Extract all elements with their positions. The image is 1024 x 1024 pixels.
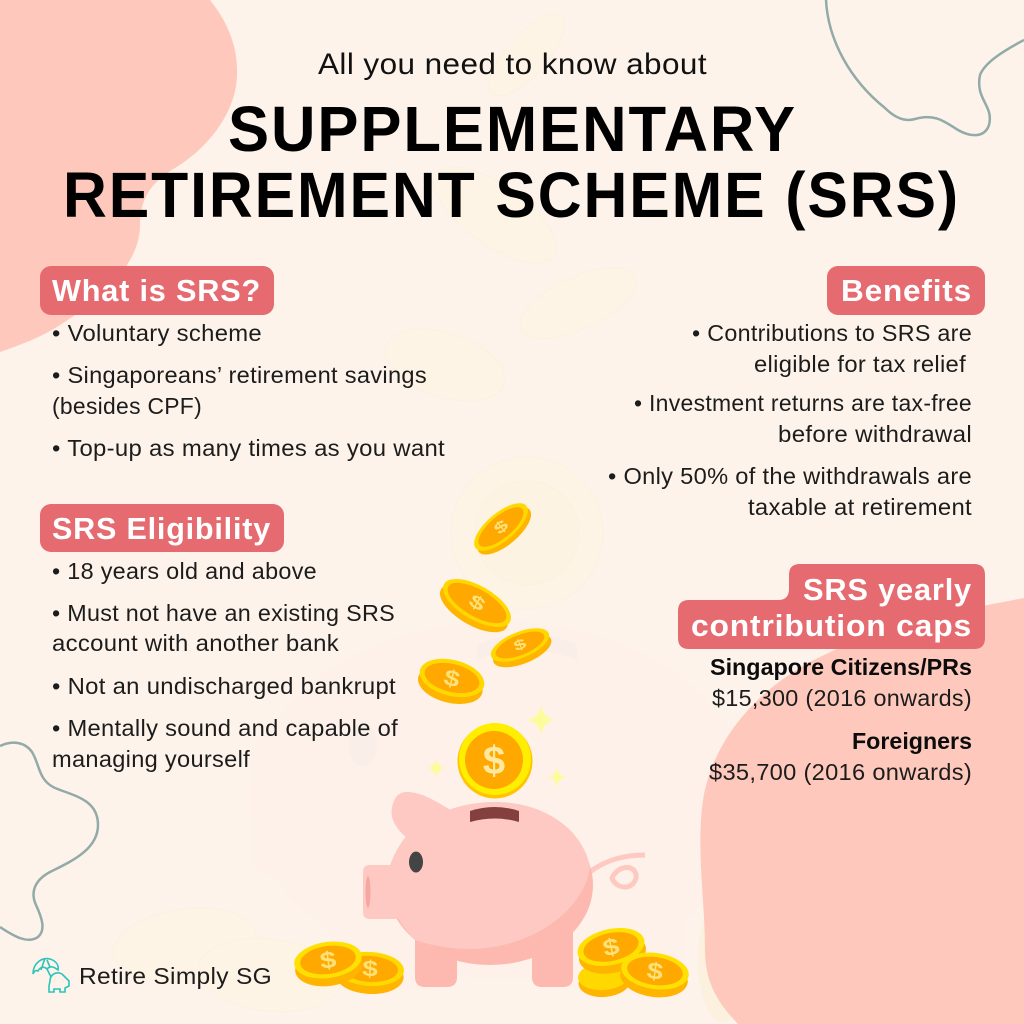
illustration: falling coin 3 bbox=[486, 621, 556, 674]
illustration: falling coin 3: $ bbox=[511, 634, 529, 654]
snout bbox=[363, 865, 398, 919]
panel: SRS eligibility bbox=[40, 504, 398, 772]
main title line 2: RETIREMENT SCHEME (SRS) bbox=[63, 159, 960, 231]
coin stack: right: $ bbox=[600, 932, 622, 962]
nostril bbox=[366, 876, 370, 908]
bullet list: eligible for tax relief bbox=[754, 351, 966, 377]
heading: Benefits bbox=[827, 266, 985, 315]
bullet list: account with another bank bbox=[52, 630, 339, 656]
bullet list: • 18 years old and above bbox=[52, 558, 317, 584]
bullet list: (besides CPF) bbox=[52, 393, 202, 419]
illustration: falling coin 1: $ bbox=[491, 517, 512, 538]
ear bbox=[392, 792, 449, 838]
illustration: falling coin 2 bbox=[433, 569, 518, 642]
illustration: piggy bank bbox=[363, 792, 645, 987]
bullet list: • Contributions to SRS are bbox=[692, 320, 972, 346]
sparkles bbox=[427, 705, 567, 788]
panel: contribution caps bbox=[678, 564, 985, 785]
bullet list: • Top-up as many times as you want bbox=[52, 435, 445, 461]
squiggle: left bbox=[0, 743, 98, 940]
illustration: falling coin 2: $ bbox=[465, 591, 489, 616]
subtitle: All you need to know about bbox=[318, 48, 707, 81]
foreigners cap: Foreigners bbox=[852, 728, 972, 754]
foreigners cap bbox=[709, 728, 972, 785]
heading: SRS Eligibility: SRS Eligibility bbox=[52, 512, 271, 546]
bullet list: • Investment returns are tax-free bbox=[634, 390, 972, 416]
background blob: top left bbox=[0, 0, 237, 352]
heading: What is SRS? bbox=[40, 266, 274, 315]
heading: Benefits: Benefits bbox=[841, 274, 972, 308]
citizens cap: Singapore Citizens/PRs bbox=[710, 654, 972, 680]
bullet list bbox=[52, 320, 445, 461]
bullet list: • Only 50% of the withdrawals are bbox=[608, 463, 972, 489]
bullet list: taxable at retirement bbox=[748, 494, 972, 520]
coin stack: left: $ bbox=[362, 956, 378, 982]
title bbox=[63, 48, 960, 231]
heading: SRS Eligibility bbox=[40, 504, 284, 552]
coin stack: left: $ bbox=[318, 946, 338, 974]
main title line 1: SUPPLEMENTARY bbox=[228, 93, 797, 165]
tail bbox=[590, 855, 645, 887]
coin stack: left bbox=[292, 937, 405, 996]
heading: SRS yearly contribution caps: contribution caps bbox=[691, 609, 972, 643]
illustration: big coin: $ bbox=[483, 739, 505, 783]
bullet list bbox=[52, 558, 398, 772]
panel: benefits bbox=[608, 266, 985, 520]
watermark: faint coin far right bbox=[698, 898, 746, 1022]
illustration: big coin bbox=[458, 723, 532, 798]
bullet list bbox=[608, 320, 972, 520]
coin stack: right bbox=[574, 922, 691, 1001]
heading: What is SRS?: What is SRS? bbox=[52, 274, 261, 308]
illustration: falling coin 1 bbox=[467, 495, 538, 563]
illustration: falling coin 4: $ bbox=[441, 665, 462, 693]
eye bbox=[409, 852, 423, 872]
watermark: faint coins bbox=[109, 3, 646, 1018]
bullet list: managing yourself bbox=[52, 746, 250, 772]
squiggle: top right bbox=[826, 0, 1024, 135]
bullet list: • Mentally sound and capable of bbox=[52, 715, 398, 741]
coin stack: right: $ bbox=[645, 957, 665, 985]
bullet list: • Not an undischarged bankrupt bbox=[52, 673, 396, 699]
coin slot bbox=[470, 807, 519, 822]
foreigners cap: $35,700 (2016 onwards) bbox=[709, 759, 972, 785]
body shade bbox=[387, 805, 593, 965]
bullet list: • Singaporeans’ retirement savings bbox=[52, 362, 427, 388]
legs bbox=[415, 930, 573, 987]
citizens cap bbox=[710, 654, 972, 711]
bullet list: before withdrawal bbox=[778, 421, 972, 447]
illustration: falling coin 4 bbox=[414, 653, 488, 710]
heading: SRS yearly contribution caps bbox=[678, 564, 985, 649]
body bbox=[388, 802, 590, 949]
heading: SRS yearly contribution caps: SRS yearly bbox=[803, 573, 972, 607]
panel: what is SRS bbox=[40, 266, 445, 461]
logo: umbrella and piggy icon bbox=[33, 958, 69, 992]
logo text: Retire Simply SG bbox=[79, 963, 272, 989]
bullet list: • Must not have an existing SRS bbox=[52, 600, 395, 626]
citizens cap: $15,300 (2016 onwards) bbox=[712, 685, 972, 711]
watermark: faint piggy bank bbox=[250, 622, 750, 990]
bullet list: • Voluntary scheme bbox=[52, 320, 262, 346]
background blob: bottom right bbox=[700, 598, 1024, 1024]
